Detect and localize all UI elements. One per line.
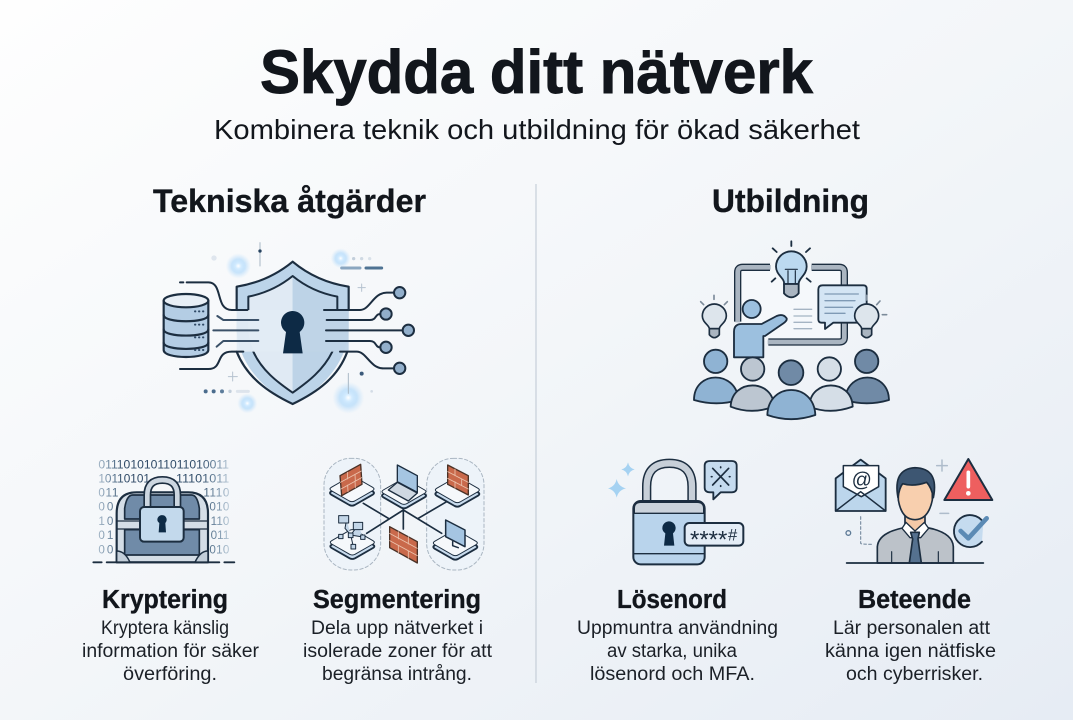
column: Kryptering [82, 458, 260, 685]
text: Beteende description: Lär personalen att [833, 618, 991, 639]
icon: laptop [388, 465, 417, 501]
binary digits: 10 [98, 515, 114, 528]
binary digits: 011 [211, 529, 229, 542]
icon: small bulb right [855, 295, 887, 338]
illustration: padlock with password [608, 461, 743, 564]
heading: Tekniska åtgärder: Tekniska åtgärder [153, 183, 426, 219]
binary digits: 10110101 [98, 472, 150, 485]
speech bubble [705, 461, 737, 499]
subtitle: Kombinera teknik och utbildning för ökad säkerhet [214, 114, 860, 145]
binary digits: 00 [98, 501, 114, 514]
audience [694, 350, 889, 419]
text: Segmentering description: begränsa intrång. [322, 664, 472, 685]
icon: envelope: @ [852, 469, 872, 491]
column: Beteende [825, 459, 996, 685]
icon: small bulb left [701, 295, 727, 338]
circuit lines [180, 282, 414, 374]
icon: presenter [734, 300, 787, 357]
illustration: employee with warnings [836, 459, 992, 563]
icon: check circle [954, 515, 987, 547]
icon: firewall [340, 464, 362, 496]
password field [685, 523, 743, 554]
binary digits: 011 [98, 486, 118, 499]
panel: Tekniska åtgärder [82, 183, 493, 685]
icon: firewall [448, 465, 468, 495]
icon: light bulb [772, 241, 811, 297]
binary digits: 01110101011011010011 [98, 458, 229, 471]
binary digits: 00 [98, 543, 114, 556]
column: Segmentering [303, 458, 493, 685]
icon: network nodes [339, 516, 365, 549]
binary digits: 1110 [203, 486, 230, 499]
icon: shield [237, 262, 349, 404]
text: Lösenord description: lösenord och MFA. [590, 664, 755, 685]
binary digits [98, 458, 230, 556]
speech bubble [818, 285, 867, 329]
text: Kryptering description: Kryptera känslig [101, 618, 229, 639]
text: Lösenord description: Uppmuntra användning [577, 618, 778, 639]
text: Lösenord description [577, 618, 778, 685]
binary digits: 11101011 [176, 472, 229, 485]
text: Lösenord description: av starka, unika [607, 641, 737, 662]
icon: person [877, 468, 953, 563]
text: Kryptering description [82, 618, 260, 685]
binary digits: 01 [98, 529, 113, 542]
illustration: shield and database [164, 243, 414, 414]
icon: monitor [446, 520, 465, 548]
icon: firewall [390, 527, 417, 563]
illustration: network segments [324, 458, 484, 570]
icon: warning triangle [944, 459, 992, 500]
text: Kryptering description: överföring. [123, 664, 217, 685]
heading: Lösenord: Lösenord [617, 586, 727, 614]
password field: **** [690, 527, 727, 554]
icon: envelope [836, 460, 886, 511]
text: Segmentering description [303, 618, 493, 685]
text: Beteende description: känna igen nätfiske [825, 641, 996, 662]
text: Beteende description: och cyberrisker. [846, 664, 983, 685]
text: Beteende description [825, 618, 996, 685]
whiteboard [740, 270, 843, 341]
text: Segmentering description: isolerade zoner för att [303, 641, 493, 662]
binary digits: 110 [211, 515, 230, 528]
binary digits: 010 [209, 501, 230, 514]
heading: Kryptering: Kryptering [102, 586, 228, 614]
heading: Beteende: Beteende [858, 586, 971, 614]
binary digits: 010 [209, 543, 230, 556]
illustration: encrypted chest [93, 458, 234, 562]
text: Segmentering description: Dela upp nätverket i [311, 618, 483, 639]
password field: # [728, 525, 738, 544]
text: Kryptering description: information för säker [82, 641, 260, 662]
heading: Segmentering: Segmentering [313, 586, 481, 614]
illustration: classroom [694, 241, 889, 419]
column: Lösenord [577, 461, 778, 685]
title: Skydda ditt nätverk [260, 38, 813, 106]
icon: database [164, 294, 208, 357]
heading: Utbildning: Utbildning [712, 183, 869, 219]
panel: Utbildning [577, 183, 996, 685]
